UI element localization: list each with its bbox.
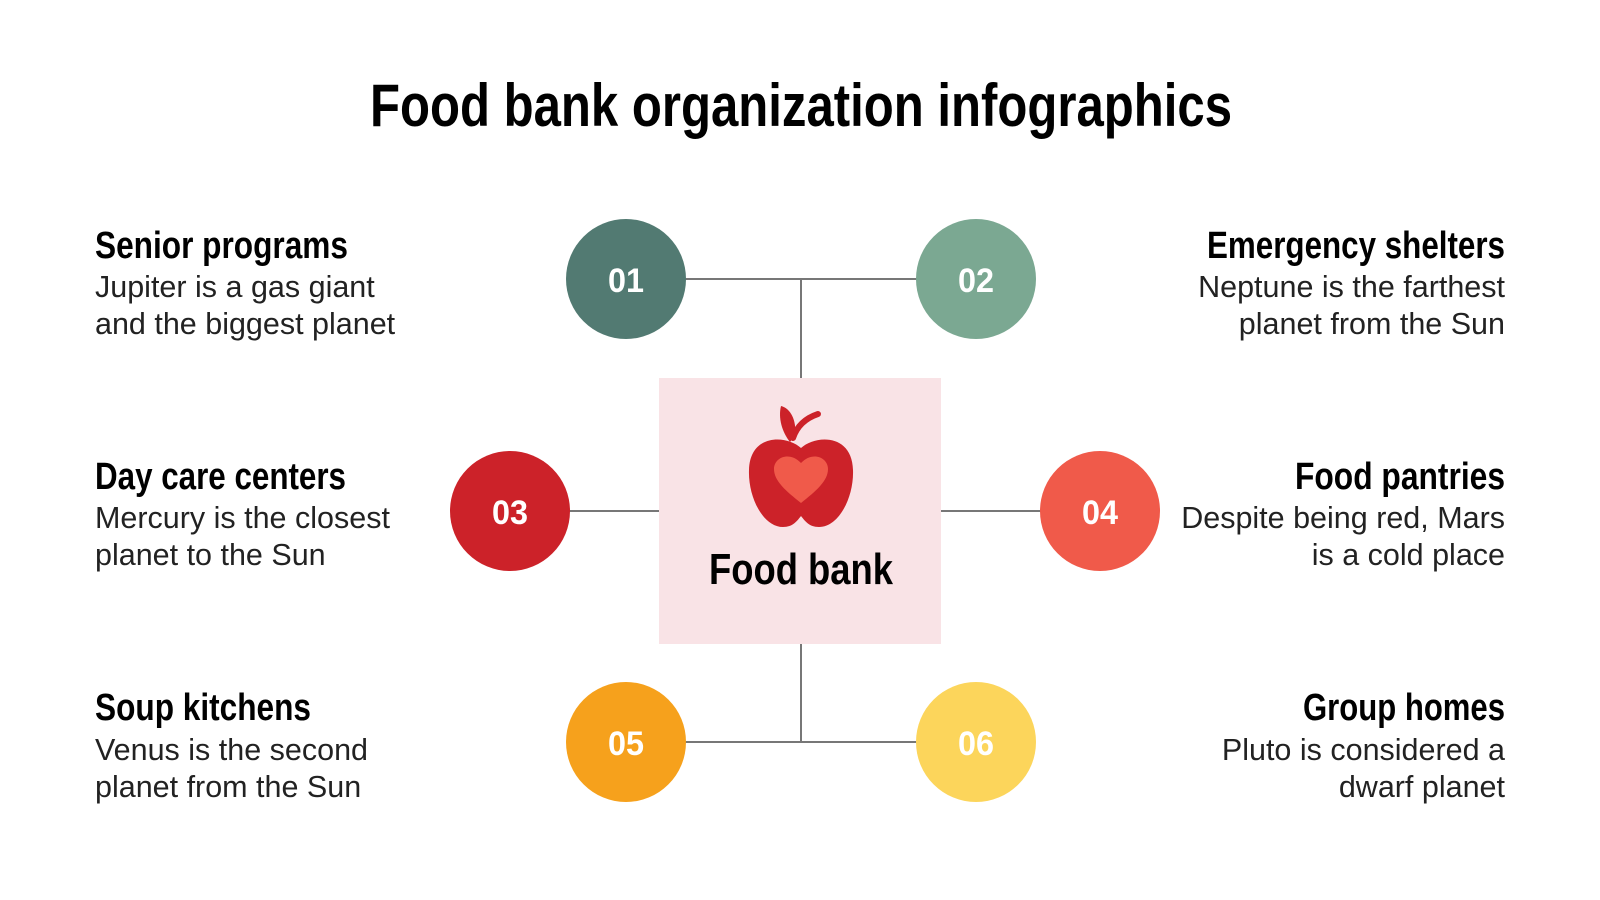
text block: food pantries xyxy=(1181,456,1505,572)
circle 06 xyxy=(916,682,1036,802)
text block: day care centers: planet to the Sun xyxy=(95,538,326,572)
text block: senior programs xyxy=(95,225,396,341)
text block: senior programs: Senior programs xyxy=(95,225,348,267)
text block: group homes xyxy=(1222,687,1506,804)
circle 04: 04 xyxy=(1082,494,1118,532)
icon: apple with heart xyxy=(749,406,853,527)
text block: day care centers: Mercury is the closest xyxy=(95,501,390,535)
circle 04 xyxy=(1040,451,1160,571)
text block: day care centers xyxy=(95,456,390,572)
text block: group homes: Group homes xyxy=(1303,687,1505,729)
text block: senior programs: and the biggest planet xyxy=(95,307,396,341)
title: Food bank organization infographics xyxy=(370,72,1232,139)
text block: group homes: Pluto is considered a xyxy=(1222,733,1505,767)
text block: emergency shelters: planet from the Sun xyxy=(1239,307,1505,341)
text block: soup kitchens: Venus is the second xyxy=(95,733,368,767)
text block: soup kitchens xyxy=(95,687,368,804)
center label: Food bank xyxy=(709,545,893,594)
text block: group homes: dwarf planet xyxy=(1339,770,1506,804)
connector lines xyxy=(510,279,1100,742)
text block: emergency shelters: Emergency shelters xyxy=(1207,225,1505,267)
text block: emergency shelters: Neptune is the farthest xyxy=(1198,270,1506,304)
text block: food pantries: Despite being red, Mars xyxy=(1181,501,1505,535)
circle 02: 02 xyxy=(958,262,994,300)
text block: food pantries: is a cold place xyxy=(1312,538,1505,572)
circle 03: 03 xyxy=(492,494,528,532)
text block: senior programs: Jupiter is a gas giant xyxy=(95,270,375,304)
text block: soup kitchens: planet from the Sun xyxy=(95,770,361,804)
center box: food bank xyxy=(659,378,941,644)
circle 05 xyxy=(566,682,686,802)
text block: emergency shelters xyxy=(1198,225,1506,341)
text block: food pantries: Food pantries xyxy=(1295,456,1505,498)
circle 05: 05 xyxy=(608,725,644,763)
circle 06: 06 xyxy=(958,725,994,763)
circle 03 xyxy=(450,451,570,571)
text block: day care centers: Day care centers xyxy=(95,456,346,498)
circle 01 xyxy=(566,219,686,339)
circle 02 xyxy=(916,219,1036,339)
circle 01: 01 xyxy=(608,262,644,300)
text block: soup kitchens: Soup kitchens xyxy=(95,687,311,729)
